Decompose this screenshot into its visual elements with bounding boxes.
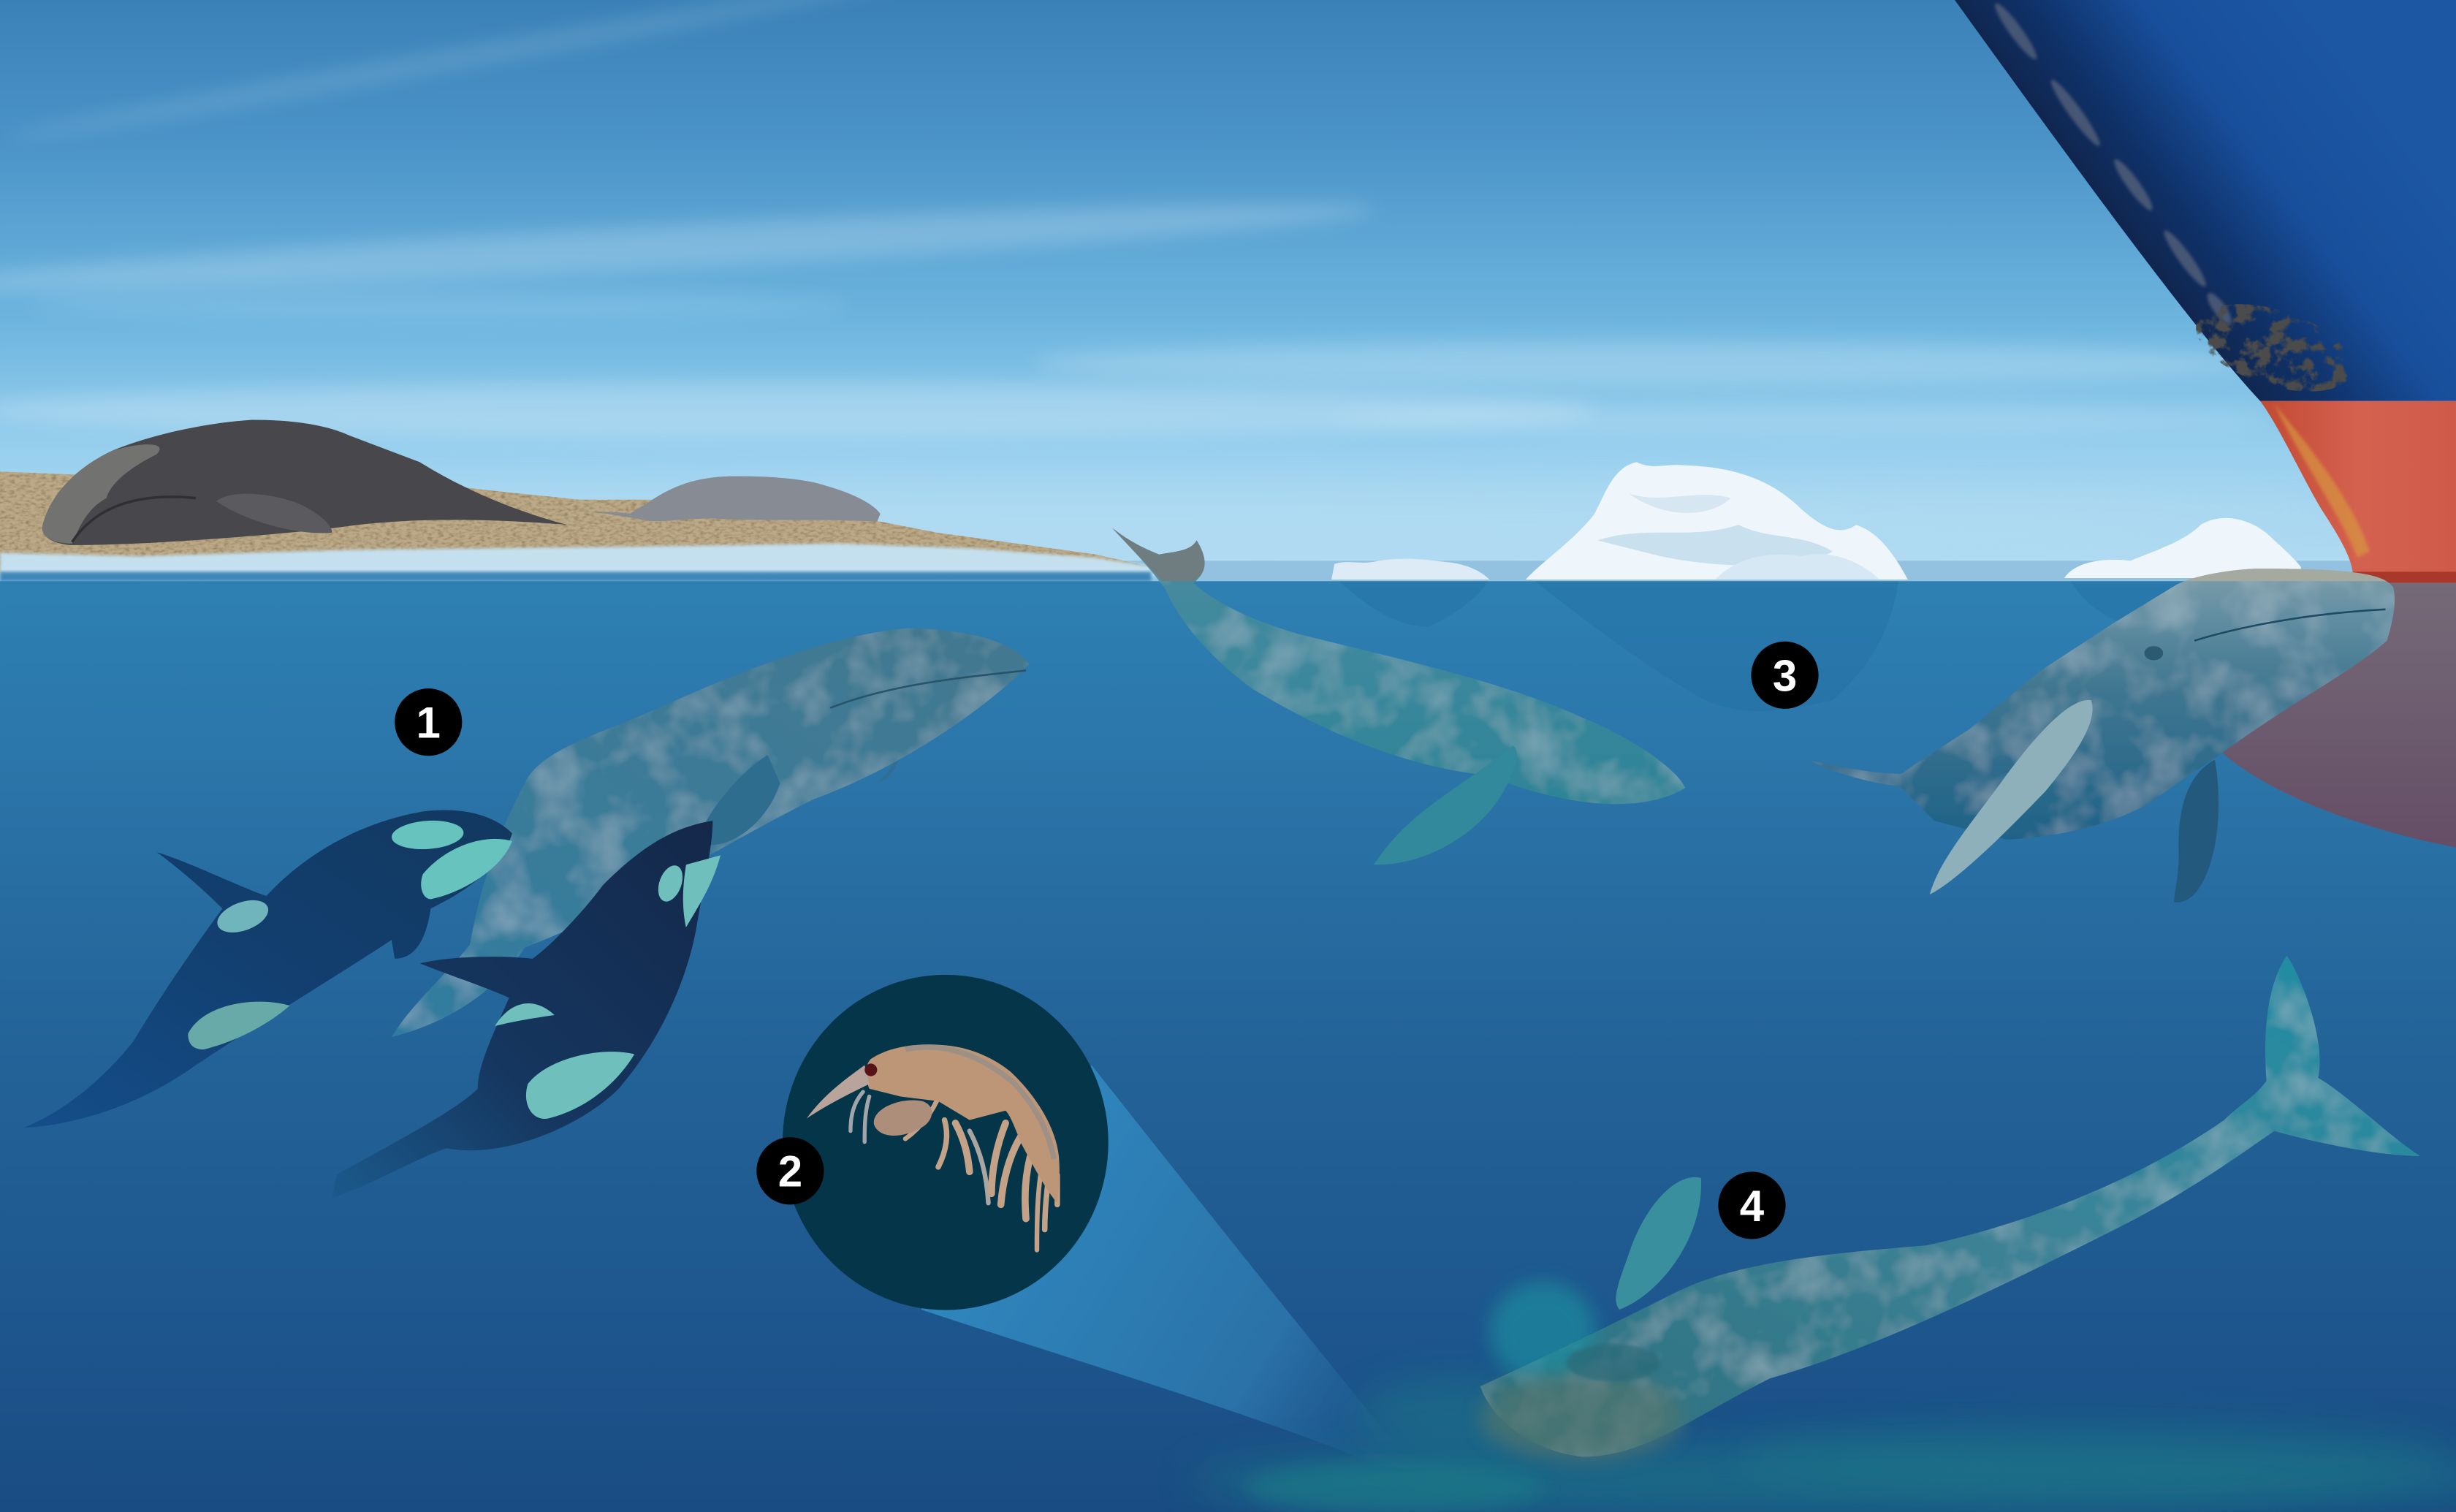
badge 4 bbox=[1718, 1171, 1786, 1239]
amphipod dorsal band bbox=[905, 1047, 1054, 1159]
foam bbox=[0, 544, 1159, 578]
ocean bbox=[0, 581, 2456, 1512]
hull red antifouling bbox=[2260, 401, 2456, 582]
shoreline bbox=[0, 419, 1159, 581]
whale: diving centre bbox=[1112, 528, 1685, 865]
badge 1 bbox=[395, 688, 462, 756]
magnifier beam bbox=[921, 1065, 1429, 1485]
beach sand bbox=[0, 470, 1151, 574]
orca: right bbox=[332, 821, 721, 1198]
whale: right humpback bbox=[1808, 569, 2395, 903]
amphipod claw bbox=[874, 1101, 932, 1136]
stranded calf bbox=[577, 476, 881, 522]
sky bbox=[0, 0, 2456, 582]
body bbox=[1808, 569, 2395, 840]
head above waterline bbox=[2184, 569, 2387, 582]
rust patch bbox=[2185, 286, 2363, 409]
carcass body bbox=[1480, 956, 2420, 1456]
hull underwater bbox=[2221, 581, 2456, 848]
amphipod body bbox=[866, 1044, 1060, 1203]
tail above waterline bbox=[1112, 528, 1205, 581]
decay cloud bbox=[1480, 1281, 1684, 1462]
far pectoral fin bbox=[2174, 760, 2219, 903]
iceberg: small left bbox=[1331, 559, 1489, 626]
stranded adult whale bbox=[42, 419, 567, 545]
iceberg: large centre bbox=[1526, 462, 1908, 711]
flipper bbox=[1374, 745, 1517, 865]
hull weathering streaks bbox=[1991, 0, 2235, 327]
iceberg: small right bbox=[2064, 518, 2301, 626]
badge 3 bbox=[1751, 642, 1819, 709]
seabed sediment bbox=[1190, 1378, 2456, 1512]
badge 2: 2 bbox=[778, 1147, 802, 1196]
ship hull bbox=[1955, 0, 2456, 848]
magnified amphipod inset bbox=[783, 975, 1109, 1310]
badge 2 bbox=[756, 1137, 824, 1204]
badge 4: 4 bbox=[1740, 1182, 1765, 1231]
orca markings bbox=[495, 855, 721, 1119]
amphipod bbox=[807, 1044, 1060, 1250]
amphipod rostrum bbox=[807, 1065, 870, 1118]
orca markings bbox=[188, 818, 512, 1049]
whale carcass on seabed bbox=[1190, 956, 2456, 1512]
carcass fin bbox=[1616, 1177, 1701, 1310]
badge 3: 3 bbox=[1773, 651, 1797, 700]
orca: left bbox=[23, 810, 512, 1128]
whale: hunted by orcas bbox=[392, 628, 1029, 1037]
hull blue paint bbox=[1955, 0, 2456, 401]
long pectoral fin bbox=[1930, 700, 2093, 894]
badge 1: 1 bbox=[417, 699, 441, 748]
